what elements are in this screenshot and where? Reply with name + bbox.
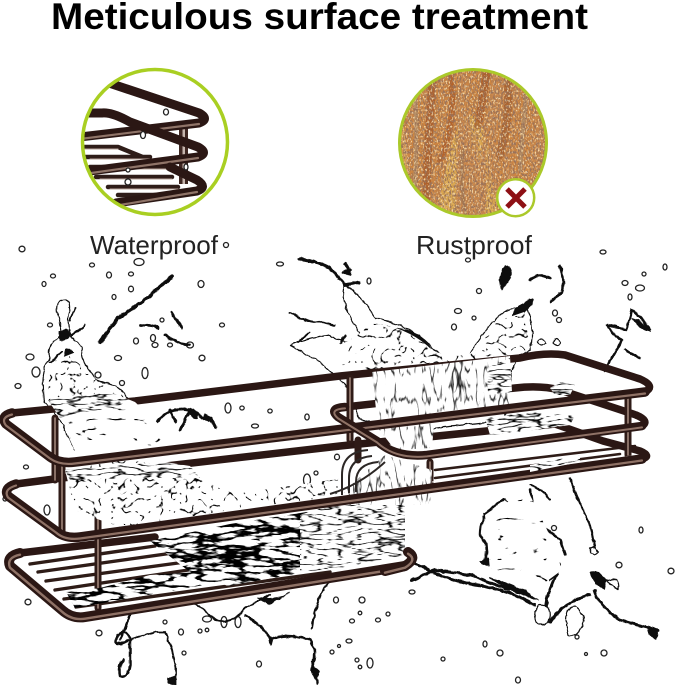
rail: small shelf front: [334, 407, 642, 457]
panel: rustproof: [398, 68, 548, 260]
water over top-right corner: [550, 382, 575, 395]
bottom shelf slats: [30, 446, 635, 607]
water over small shelf: [485, 412, 575, 435]
circle: waterproof close-up of rack: [80, 70, 228, 214]
label: Rustproof: Rustproof: [416, 230, 533, 260]
water: mid-left flow: [65, 460, 345, 530]
rail: bottom front: [9, 552, 412, 619]
splash: back-layer water plumes: [43, 259, 658, 684]
water droplets: [3, 242, 674, 683]
splash: water over the rails: [48, 358, 580, 480]
back rails: [12, 354, 649, 553]
water over top-left rail: [48, 392, 135, 418]
water column over back rail: [487, 358, 512, 395]
rail: lower front: [7, 459, 642, 539]
splash: left plume: [43, 276, 216, 450]
water over lower-left rail: [65, 462, 200, 480]
support posts: [55, 378, 628, 608]
texture: right plume body: [338, 312, 530, 380]
water pouring through shelf: [58, 356, 640, 608]
icon: red cross badge: [497, 179, 534, 216]
splash: right plume: [290, 259, 650, 430]
label: Waterproof: Waterproof: [90, 230, 219, 260]
rail: top front: [4, 392, 645, 464]
panel: waterproof: [80, 70, 228, 260]
texture: lower-right mass: [485, 495, 562, 590]
shelf: back rails, slats and posts: [12, 354, 649, 608]
splash: lower-right spray: [412, 478, 658, 640]
water: white block behind the shelf: [345, 455, 432, 505]
circle: rusted metal texture: [398, 68, 548, 220]
water: lower basket stripe: [66, 572, 232, 608]
texture: left plume body: [48, 352, 130, 416]
shelf: front rails: [4, 392, 645, 619]
water: soft right block: [300, 500, 405, 572]
water over slats: [530, 455, 580, 472]
water: central column: [372, 356, 512, 450]
water: central dense flow: [150, 506, 345, 586]
splash: lower-left spray: [116, 580, 330, 684]
water texture: plumes: [48, 312, 562, 590]
water: curved inner wire loops: [330, 450, 385, 495]
water: upper-left flow: [58, 402, 185, 462]
water: thin white highlight under small shelf: [432, 455, 640, 482]
